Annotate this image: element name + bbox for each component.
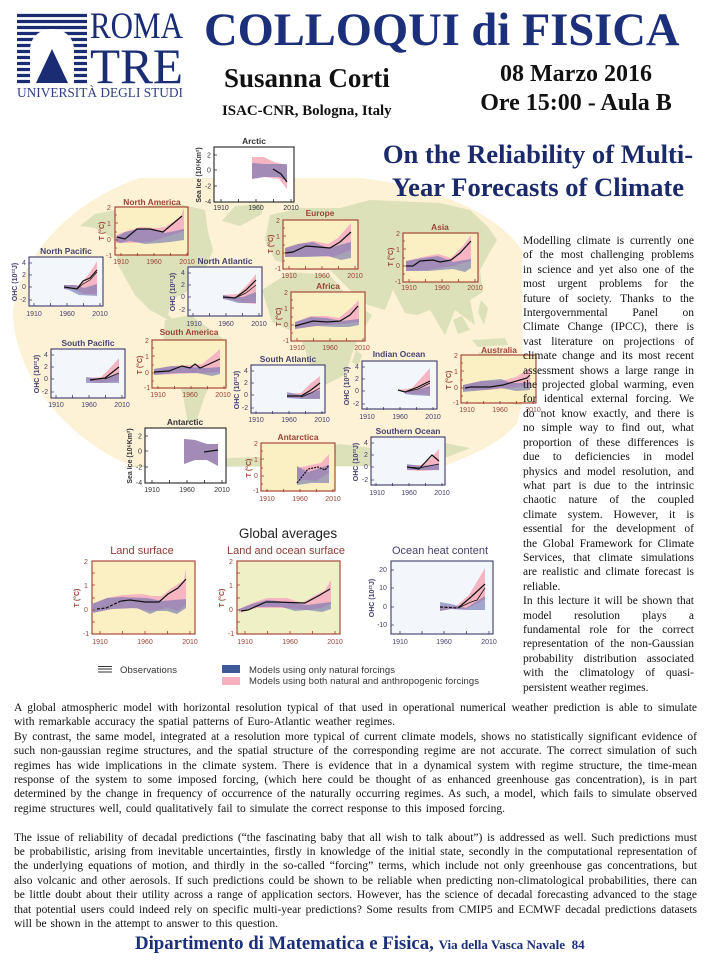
- date and time: Ore 15:00 - Aula B: [480, 90, 672, 116]
- chart: South Atlantic: [234, 354, 330, 424]
- legend: Models using only natural forcings: [249, 665, 395, 676]
- abstract: right column: fundamental role for the correct: [523, 624, 694, 636]
- chart: South Pacific: 1910: [48, 402, 64, 409]
- chart: Land surface: [73, 545, 198, 646]
- chart: Indian Ocean: 2010: [425, 414, 441, 421]
- chart: Asia: T (°C): [387, 248, 395, 266]
- abstract: right column: Intergovernmental Panel on: [523, 307, 694, 319]
- chart: South Pacific: -2: [42, 389, 48, 396]
- chart: North Pacific: 4: [22, 260, 26, 267]
- chart: Asia: 1960: [434, 285, 450, 292]
- chart: Antarctic: 1910: [144, 487, 160, 494]
- chart: Africa: T (°C): [275, 308, 283, 326]
- chart: North Pacific: 1910: [26, 311, 42, 318]
- chart: Antarctic: 2010: [214, 487, 230, 494]
- chart: Asia: Asia: [431, 222, 449, 232]
- abstract: bottom paragraphs: By contrast, the same model, integrated at a resolution more typical of current climate models, shows no statistically significant evidence of: [14, 731, 697, 743]
- chart: Ocean heat content: Ocean heat content: [392, 545, 488, 557]
- chart: South Pacific: OHC (10²²J): [34, 355, 41, 393]
- chart: Land surface: 1910: [92, 639, 108, 646]
- chart: Australia: -1: [453, 400, 459, 407]
- chart: Ocean heat content: -10: [377, 622, 387, 629]
- chart: Arctic: 1960: [248, 205, 264, 212]
- chart: Antarctic: 2: [138, 434, 142, 440]
- chart: Europe: 1: [276, 234, 280, 241]
- chart: Land and ocean surface: 2010: [327, 639, 343, 646]
- chart: Arctic: -2: [205, 184, 211, 190]
- chart: Africa: 2010: [354, 345, 370, 352]
- abstract: right column: Modelling climate is currently one: [523, 235, 694, 247]
- chart: Arctic: 2: [207, 152, 211, 160]
- chart: Ocean heat content: [369, 545, 497, 646]
- abstract: right column: Services, that climate simulations: [523, 552, 694, 564]
- chart: Ocean heat content: 1910: [392, 639, 408, 646]
- chart: Southern Ocean: Southern Ocean: [376, 426, 440, 436]
- chart: North America: 2: [107, 205, 111, 212]
- abstract: right column: due to deficiencies in model: [523, 451, 694, 463]
- chart: North Pacific: OHC (10²²J): [12, 263, 19, 301]
- chart: North Pacific: 0: [22, 284, 26, 291]
- chart: Asia: 1: [396, 247, 400, 254]
- chart: North America: [98, 197, 195, 266]
- chart: South Atlantic: 0: [244, 392, 248, 399]
- chart: Australia: 2010: [525, 407, 541, 414]
- chart: Antarctica: 0: [254, 473, 258, 480]
- chart: Asia: 0: [396, 263, 400, 270]
- abstract: bottom paragraphs: response of the system to some imposed forcing, (which here could be thought of as enhanced greenhouse gas concentration), is in part: [14, 774, 697, 786]
- chart: North America: 0: [107, 237, 111, 244]
- chart: North America: 1910: [113, 259, 129, 266]
- abstract: right column: do not know exactly, and there is: [523, 408, 694, 420]
- chart: Antarctica: Antarctica: [278, 432, 319, 442]
- chart: Southern Ocean: 1910: [369, 490, 385, 497]
- chart: South Atlantic: OHC (10²²J): [234, 371, 241, 409]
- chart: Indian Ocean: 1910: [359, 414, 375, 421]
- chart: Indian Ocean: 2: [355, 376, 359, 383]
- chart: North Atlantic: OHC (10²²J): [170, 273, 177, 311]
- logo: Roma Tre: ROMA: [90, 6, 183, 47]
- chart: Land and ocean surface: 1: [229, 583, 233, 590]
- abstract: right column: persistent weather regimes.: [523, 682, 648, 694]
- abstract: right column: climate system. However, it is: [523, 509, 694, 521]
- chart: South Atlantic: 2: [244, 380, 248, 387]
- chart: Land surface: 2010: [182, 639, 198, 646]
- abstract: bottom paragraphs: with remarkable accuracy the spatial patterns of Euro-Atlantic weather regimes.: [14, 716, 395, 728]
- chart: North Pacific: 2010: [92, 311, 108, 318]
- abstract: bottom paragraphs: that potential users could indeed rely on specific multi-year predictions? Some results from CMIP5 and ECMWF decadal predictions datasets: [14, 904, 697, 916]
- chart: Arctic: -4: [205, 199, 211, 206]
- abstract: right column: with the climatology of quasi-: [523, 667, 694, 679]
- world map background: [13, 178, 523, 467]
- chart: Africa: 1910: [289, 345, 305, 352]
- chart: Land surface: 2: [84, 559, 88, 566]
- talk title: Year Forecasts of Climate: [392, 172, 684, 202]
- chart: Africa: [275, 281, 370, 352]
- chart: North America: 1960: [146, 259, 162, 266]
- chart: South America: -1: [144, 385, 150, 392]
- abstract: right column: probability distribution associated: [523, 653, 694, 665]
- heading: Global averages: Global averages: [239, 526, 337, 541]
- chart: Indian Ocean: Indian Ocean: [373, 349, 425, 359]
- chart: Land surface: 0: [84, 607, 88, 614]
- abstract: bottom paragraphs: will be shown in the attempt to answer to this question.: [14, 918, 278, 930]
- chart: North Pacific: [12, 246, 108, 318]
- chart: North Atlantic: 1960: [218, 321, 234, 328]
- chart: Asia: [387, 222, 483, 292]
- chart: Southern Ocean: 2010: [434, 490, 450, 497]
- chart: South America: T (°C): [136, 356, 144, 374]
- chart: North Pacific: North Pacific: [40, 246, 92, 256]
- chart: South America: [136, 327, 231, 399]
- chart: South America: 2010: [215, 392, 231, 399]
- chart: Europe: 1910: [281, 273, 297, 280]
- abstract: bottom paragraphs: regimes has wide implications in the climate system. There is evidence that in a dynamical system with regime structure, the time-mean: [14, 760, 697, 772]
- abstract: right column: of the most challenging problems: [523, 249, 694, 261]
- chart: South Pacific: 4: [44, 352, 48, 359]
- chart: Ocean heat content: 20: [379, 567, 387, 574]
- chart: Australia: [445, 345, 541, 414]
- chart: Ocean heat content: 0: [383, 604, 387, 611]
- speaker name: Susanna Corti: [224, 63, 390, 93]
- chart: North America: T (°C): [98, 222, 106, 240]
- chart: North Atlantic: North Atlantic: [197, 256, 253, 266]
- chart: Antarctica: 1: [254, 457, 258, 464]
- abstract: right column: no simple way to find out, what: [523, 422, 694, 434]
- chart: Antarctica: -1: [253, 488, 259, 495]
- chart: Land surface: -1: [83, 631, 89, 638]
- chart: South Pacific: 1960: [81, 402, 97, 409]
- chart: Africa: 1960: [322, 345, 338, 352]
- legend: Models using both natural and anthropogenic forcings: [249, 676, 479, 687]
- abstract: right column: In this lecture it will be shown that: [523, 595, 694, 607]
- abstract: right column: the Global Framework for Climate: [523, 538, 694, 550]
- date and time: 08 Marzo 2016: [500, 61, 652, 87]
- chart: Europe: -1: [275, 266, 281, 273]
- abstract: right column: essential for the development of: [523, 523, 694, 535]
- chart: North America: -1: [106, 253, 112, 260]
- chart: Antarctica: T (°C): [245, 459, 253, 477]
- chart: Australia: 0: [454, 385, 458, 392]
- abstract: right column: future of society. Thanks to the: [523, 293, 694, 305]
- chart: North Atlantic: -2: [179, 307, 185, 314]
- chart: Land and ocean surface: 0: [229, 607, 233, 614]
- chart: Antarctic: -2: [136, 464, 142, 472]
- chart: South America: 1: [145, 354, 149, 361]
- chart: South Pacific: 2010: [114, 402, 130, 409]
- chart: Land surface: 1960: [137, 639, 153, 646]
- chart: Southern Ocean: [353, 426, 450, 497]
- abstract: bottom paragraphs: such non-gaussian regime structures, and the spatial structure of the corresponding regime are not accurate. The correct simulation of such: [14, 745, 697, 757]
- abstract: right column: what part is due to the intrinsic: [523, 480, 694, 492]
- chart: Africa: Africa: [316, 281, 340, 291]
- abstract: right column: climate change and its most recent: [523, 350, 694, 362]
- chart: Indian Ocean: 0: [355, 388, 359, 395]
- chart: South America: 0: [145, 370, 149, 377]
- chart: Asia: 1910: [401, 285, 417, 292]
- chart: Africa: 1: [284, 306, 288, 313]
- chart: Antarctic: 0: [138, 448, 142, 456]
- chart: South Atlantic: 2010: [314, 417, 330, 424]
- chart: Europe: [267, 208, 363, 280]
- chart: Indian Ocean: -2: [353, 401, 359, 408]
- chart: Antarctica: 2: [254, 441, 258, 448]
- chart: Australia: 1910: [459, 407, 475, 414]
- title: Colloqui di Fisica: COLLOQUI di FISICA: [204, 5, 679, 56]
- chart: Antarctica: 2010: [325, 496, 341, 503]
- chart: Asia: -1: [395, 279, 401, 286]
- chart: Ocean heat content: 2010: [481, 639, 497, 646]
- abstract: right column: for identical external forcing. We: [523, 393, 694, 405]
- chart: Land and ocean surface: 1910: [237, 639, 253, 646]
- abstract: right column: [523, 235, 694, 694]
- chart: Antarctic: Antarctic: [167, 417, 203, 427]
- chart: Australia: 1: [454, 369, 458, 376]
- abstract: bottom paragraphs: also volcanic and other aerosols. If such predictions could be shown to be reliable when predicting non-climatological probabilities, there can: [14, 875, 697, 887]
- chart: North America: 1: [107, 221, 111, 228]
- chart: South Pacific: [34, 338, 130, 409]
- chart: Land and ocean surface: 1960: [282, 639, 298, 646]
- chart: Asia: 2010: [467, 285, 483, 292]
- chart: Antarctic: [127, 417, 230, 494]
- chart: Southern Ocean: 0: [364, 464, 368, 471]
- chart: Arctic: [196, 136, 299, 212]
- abstract: bottom paragraphs: be little doubt about their utility across a range of application sectors. However, has the science of decadal forecasting advanced to the stage: [14, 889, 697, 901]
- chart: Arctic: 1910: [213, 205, 229, 212]
- abstract: right column: representation of the non-Gaussian: [523, 638, 694, 650]
- chart: North America: North America: [123, 197, 181, 207]
- chart: Land and ocean surface: 2: [229, 559, 233, 566]
- chart: Europe: Europe: [306, 208, 335, 218]
- date and time: [480, 61, 672, 116]
- abstract: right column: the projected global warming, even: [523, 379, 694, 391]
- chart: North Atlantic: 1910: [186, 321, 202, 328]
- chart: Land and ocean surface: -1: [228, 631, 234, 638]
- chart: North Atlantic: 4: [181, 270, 185, 277]
- chart: Southern Ocean: OHC (10²²J): [353, 443, 360, 481]
- chart: Europe: T (°C): [267, 235, 275, 253]
- chart: North Atlantic: 2010: [251, 321, 267, 328]
- chart: Land and ocean surface: T (°C): [218, 589, 226, 607]
- abstract: bottom paragraphs: determined by the change in frequency of occurrence of the naturally occurring regimes. As such, a model, which fails to simulate observed: [14, 788, 697, 800]
- abstract: bottom paragraphs: regime structures well, could qualitatively fail to simulate the correct response to this imposed forcing.: [14, 803, 505, 815]
- chart: South Atlantic: 4: [244, 368, 248, 375]
- chart: Indian Ocean: 1960: [392, 414, 408, 421]
- abstract: right column: proportion of these differences is: [523, 437, 694, 449]
- chart: Asia: 2: [396, 231, 400, 238]
- abstract: right column: Climate Change (IPCC), there is: [523, 321, 694, 333]
- chart: Africa: 2: [284, 290, 288, 297]
- chart: North Pacific: 1960: [59, 311, 75, 318]
- chart: Europe: 0: [276, 250, 280, 257]
- abstract: right column: most urgent problems for the: [523, 278, 694, 290]
- abstract: right column: model resolution plays a: [523, 610, 694, 622]
- legend: Observations: [120, 665, 177, 676]
- abstract: bottom paragraphs: A global atmospheric model with horizontal resolution typical of that used in operational numerical weather prediction is able to simulate: [14, 702, 697, 714]
- chart: Southern Ocean: 2: [364, 452, 368, 459]
- chart: Africa: 0: [284, 322, 288, 329]
- chart: South Pacific: 0: [44, 376, 48, 383]
- abstract: right column: vast literature on projections of: [523, 336, 694, 348]
- chart: South Pacific: 2: [44, 364, 48, 371]
- chart: South America: 1960: [182, 392, 198, 399]
- chart: Australia: 1960: [492, 407, 508, 414]
- chart: Ocean heat content: 10: [379, 585, 387, 592]
- abstract: right column: assessment shows a large range in: [523, 365, 694, 377]
- chart: Land surface: T (°C): [73, 589, 81, 607]
- chart: Southern Ocean: 1960: [401, 490, 417, 497]
- chart: Antarctica: 1960: [292, 496, 308, 503]
- chart: Arctic: Arctic: [242, 136, 266, 146]
- chart: North Pacific: 2: [22, 272, 26, 279]
- chart: North Atlantic: 2: [181, 282, 185, 289]
- logo: Roma Tre: TRE: [90, 38, 183, 94]
- chart: Land and ocean surface: [218, 545, 345, 646]
- chart: South Atlantic: 1960: [281, 417, 297, 424]
- talk title: On the Reliability of Multi-: [383, 139, 693, 169]
- chart: North Pacific: -2: [20, 297, 26, 304]
- chart: North America: 2010: [179, 259, 195, 266]
- logo: Roma Tre: [17, 6, 183, 101]
- chart: Land surface: Land surface: [110, 545, 174, 557]
- chart: Indian Ocean: [344, 349, 441, 421]
- abstract: right column: chaotic nature of the coupled: [523, 494, 694, 506]
- chart: Arctic: Sea Ice (10⁶Km²): [196, 147, 203, 203]
- abstract: bottom paragraphs: [14, 702, 697, 930]
- chart: Australia: 2: [454, 353, 458, 360]
- abstract: right column: are realistic and climate forecast is: [523, 566, 694, 578]
- chart: South Atlantic: 1910: [248, 417, 264, 424]
- chart: Africa: -1: [283, 338, 289, 345]
- chart: Land and ocean surface: Land and ocean surface: [227, 545, 345, 557]
- chart: Indian Ocean: 4: [355, 364, 359, 371]
- chart: Ocean heat content: 1960: [436, 639, 452, 646]
- talk title: [383, 139, 693, 202]
- abstract: bottom paragraphs: the underlying equations of motion, and thirdly in the so-called “forcing” terms, which include not only greenhouse gas concentrations, but: [14, 860, 697, 872]
- chart: South Atlantic: -2: [242, 405, 248, 412]
- chart: Antarctic: Sea Ice (10⁶Km²): [127, 428, 134, 484]
- abstract: right column: in science and yet also one of the: [523, 264, 694, 276]
- chart: Australia: Australia: [481, 345, 517, 355]
- abstract: bottom paragraphs: The issue of reliability of decadal predictions (“the fascinating baby that all wish to talk about”) is addressed as well. Such predictions must: [14, 832, 697, 844]
- chart: Australia: T (°C): [445, 371, 453, 389]
- chart: Antarctica: 1910: [259, 496, 275, 503]
- chart: Europe: 2010: [347, 273, 363, 280]
- chart: Southern Ocean: 4: [364, 440, 368, 447]
- chart: Antarctic: 1960: [179, 487, 195, 494]
- chart: Europe: 1960: [314, 273, 330, 280]
- chart: Antarctica: [245, 432, 341, 503]
- logo: Roma Tre: UNIVERSITÀ DEGLI STUDI: [17, 84, 183, 101]
- chart: Antarctic: -4: [136, 480, 142, 487]
- chart: Indian Ocean: OHC (10²²J): [344, 367, 351, 405]
- chart: North Atlantic: [170, 256, 267, 328]
- footer: department and address: Dipartimento di Matematica e Fisica, Via della Vasca Navale 84: [135, 933, 585, 954]
- abstract: right column: physics and model resolution, and: [523, 466, 694, 478]
- chart: Land surface: 1: [84, 583, 88, 590]
- abstract: bottom paragraphs: be probabilistic, arising from inevitable uncertainties, firstly in knowledge of the initial state, secondly in the computational representation of: [14, 846, 697, 858]
- chart: Arctic: 2010: [283, 205, 299, 212]
- chart: South America: 1910: [150, 392, 166, 399]
- chart: South America: South America: [160, 327, 219, 337]
- chart: South America: 2: [145, 338, 149, 345]
- chart: South Atlantic: South Atlantic: [260, 354, 317, 364]
- chart: Arctic: 0: [207, 168, 211, 174]
- chart: Europe: 2: [276, 218, 280, 225]
- speaker affiliation: ISAC-CNR, Bologna, Italy: [222, 102, 392, 118]
- chart: Southern Ocean: -2: [362, 477, 368, 484]
- chart: North Atlantic: 0: [181, 294, 185, 301]
- chart: South Pacific: South Pacific: [61, 338, 115, 348]
- legend: [98, 665, 479, 687]
- abstract: right column: reliable.: [523, 581, 560, 593]
- chart: Ocean heat content: OHC (10²²J): [369, 579, 376, 617]
